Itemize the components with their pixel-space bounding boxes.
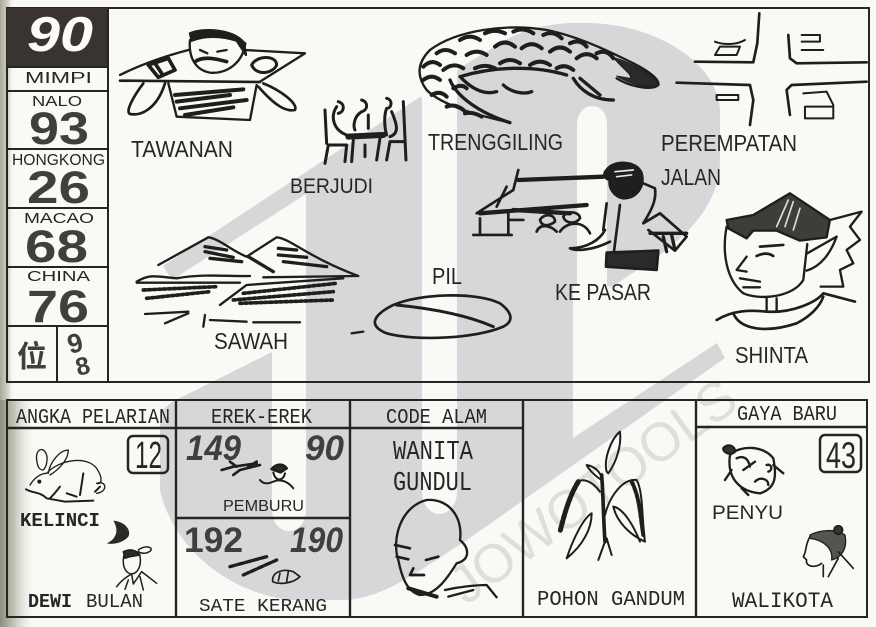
label dewi bulan: DEWI — [28, 591, 72, 613]
panel: angka pelarian — [16, 407, 170, 613]
icon: wheat plant — [560, 432, 645, 560]
row hongkong: 26 — [27, 162, 90, 213]
icon: walikota — [803, 526, 853, 577]
label trenggiling: TRENGGILING — [428, 129, 563, 155]
numbers 149 90: 149 — [186, 429, 241, 468]
illustration: shinta — [717, 193, 862, 329]
label kelinci: KELINCI — [20, 510, 100, 532]
label pil: PIL — [432, 263, 462, 289]
heading: GAYA BARU — [737, 404, 837, 427]
illustration: berjudi — [325, 98, 406, 163]
row hongkong — [12, 152, 105, 213]
panel: top frame — [7, 8, 869, 382]
header box 90: 90 — [27, 8, 93, 62]
symbol digits 9 8: 9 — [64, 327, 86, 360]
number box 12 — [128, 435, 168, 477]
label pemburu: PEMBURU — [223, 498, 304, 515]
panel: pohon gandum — [537, 432, 685, 612]
icon: turtle — [723, 445, 783, 495]
label mimpi: MIMPI — [25, 70, 92, 87]
label wanita gundul — [393, 438, 474, 499]
label ke pasar: KE PASAR — [555, 279, 651, 305]
icon: moon — [107, 521, 129, 544]
panel: erek-erek — [184, 407, 345, 617]
label wanita gundul: WANITA — [393, 438, 474, 468]
numbers 192 190: 190 — [290, 521, 343, 560]
row macao — [24, 210, 94, 272]
label sate kerang: SATE KERANG — [199, 597, 327, 617]
label tawanan: TAWANAN — [131, 136, 233, 162]
label perempatan jalan — [661, 130, 797, 190]
heading: ANGKA PELARIAN — [16, 407, 170, 430]
watermark text: JOWOTOOLS — [438, 367, 748, 616]
label dewi bulan — [28, 591, 143, 613]
icon: bald head — [395, 500, 497, 597]
row hongkong: HONGKONG — [12, 152, 105, 169]
label perempatan jalan: PEREMPATAN — [661, 130, 797, 156]
row china — [27, 268, 90, 332]
label perempatan jalan: JALAN — [661, 164, 721, 190]
row macao: 68 — [25, 221, 88, 272]
heading: EREK-EREK — [211, 407, 312, 430]
symbol digits 9 8: 8 — [73, 351, 93, 382]
illustration: trenggiling — [420, 27, 659, 123]
row china: CHINA — [27, 268, 90, 285]
heading: CODE ALAM — [386, 407, 487, 430]
row macao: MACAO — [24, 210, 94, 227]
icon: hunter and dog — [222, 462, 293, 488]
row nalo: NALO — [32, 93, 82, 110]
numbers 149 90: 90 — [305, 429, 345, 468]
row nalo: 93 — [29, 103, 89, 154]
label sawah: SAWAH — [214, 328, 288, 354]
symbol digits 9 8 — [64, 327, 93, 382]
illustration: perempatan jalan — [677, 13, 867, 125]
watermark logo — [160, 23, 748, 616]
row nalo — [29, 93, 89, 154]
illustration: ke pasar — [473, 163, 687, 270]
label wanita gundul: GUNDUL — [393, 469, 472, 499]
number box 43: 43 — [826, 435, 856, 476]
symbol glyph: 位 — [17, 340, 47, 374]
numbers 149 90 — [186, 429, 345, 468]
illustration: tawanan — [120, 30, 305, 120]
panel: number sidebar — [7, 8, 109, 382]
label shinta: SHINTA — [735, 342, 809, 368]
panel: code alam — [386, 407, 497, 597]
numbers 192 190: 192 — [184, 521, 243, 560]
illustration: pil — [375, 295, 510, 338]
header box 90 — [7, 8, 109, 67]
row china: 76 — [27, 281, 89, 332]
label walikota: WALIKOTA — [732, 589, 834, 614]
icon: rabbit — [26, 450, 105, 502]
icon: dewi bulan — [117, 547, 157, 590]
illustration: sawah — [137, 237, 363, 333]
label dewi bulan: BULAN — [86, 591, 143, 613]
panel: gaya baru — [712, 404, 861, 614]
panel: bottom boxes — [7, 400, 867, 617]
number box 12: 12 — [135, 435, 162, 477]
label pohon gandum: POHON GANDUM — [537, 589, 685, 612]
label berjudi: BERJUDI — [290, 175, 373, 198]
numbers 192 190 — [184, 521, 343, 560]
icon: sate and shell — [230, 557, 300, 583]
label penyu: PENYU — [712, 503, 783, 524]
